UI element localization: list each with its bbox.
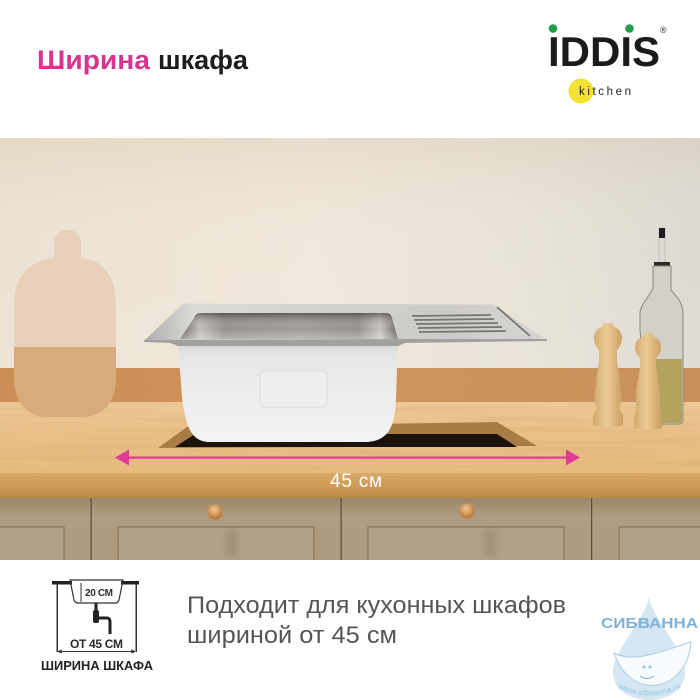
diagram drain pipe [96, 603, 110, 634]
sink label plate [260, 371, 327, 407]
oil bottle [640, 228, 683, 424]
title: шкафа [158, 45, 249, 75]
pepper mill large [593, 323, 623, 427]
description line 2: шириной от 45 см [187, 622, 397, 649]
bottle neck ring [654, 262, 670, 266]
diagram depth label: 20 СМ [85, 588, 113, 599]
width arrow [115, 450, 580, 466]
watermark drop [613, 597, 685, 700]
wall [0, 138, 700, 370]
logo wordmark: IDDIS [548, 28, 660, 75]
diagram caption: ШИРИНА ШКАФА [41, 659, 153, 673]
diagram width label: ОТ 45 СМ [70, 637, 123, 651]
sink bowl [180, 313, 398, 339]
diagram width dimension line [58, 650, 135, 653]
watermark bathtub [614, 642, 691, 685]
cutting board [14, 230, 116, 417]
diagram sink bowl [70, 580, 123, 603]
cabinet width diagram icon [41, 580, 153, 673]
sink drainboard grooves [412, 307, 530, 336]
watermark: Sibvanna [601, 598, 699, 700]
bottle glass [640, 266, 683, 424]
pepper mill small [634, 333, 662, 430]
diagram trap body [93, 610, 99, 623]
sink [144, 304, 547, 442]
countertop front edge [0, 473, 700, 499]
kitchen scene photo panel [0, 138, 700, 567]
knob shadows [226, 530, 496, 556]
sink front lip [144, 339, 547, 346]
bottle spout [659, 228, 665, 263]
countertop cut-out [158, 422, 537, 448]
cabinet knob right [460, 504, 474, 518]
cabinets [0, 498, 700, 560]
bottle oil [656, 359, 682, 423]
back strip of countertop [0, 368, 700, 403]
cabinet knob left [208, 504, 222, 520]
diagram cabinet walls [56, 584, 137, 652]
logo: IDDIS kitchen [548, 24, 667, 104]
sink body [178, 342, 398, 442]
watermark url: www.sibvanna.ru [619, 684, 680, 696]
width label: 45 см [330, 471, 382, 492]
logo registered mark: ® [660, 25, 667, 35]
bottle cap [659, 228, 665, 238]
watermark tub face [640, 666, 654, 678]
countertop surface [0, 402, 700, 473]
description text [187, 592, 566, 649]
logo kitchen text: kitchen [579, 86, 631, 98]
logo yellow circle [568, 78, 594, 104]
logo green dots [549, 24, 634, 33]
watermark brand: СИБВАННА [601, 616, 699, 632]
description line 1: Подходит для кухонных шкафов [187, 592, 566, 619]
wood grain [78, 406, 530, 458]
sink rim [145, 304, 545, 340]
title: Ширина [37, 45, 151, 75]
diagram depth arrow [80, 583, 82, 602]
diagram countertop [52, 581, 139, 584]
